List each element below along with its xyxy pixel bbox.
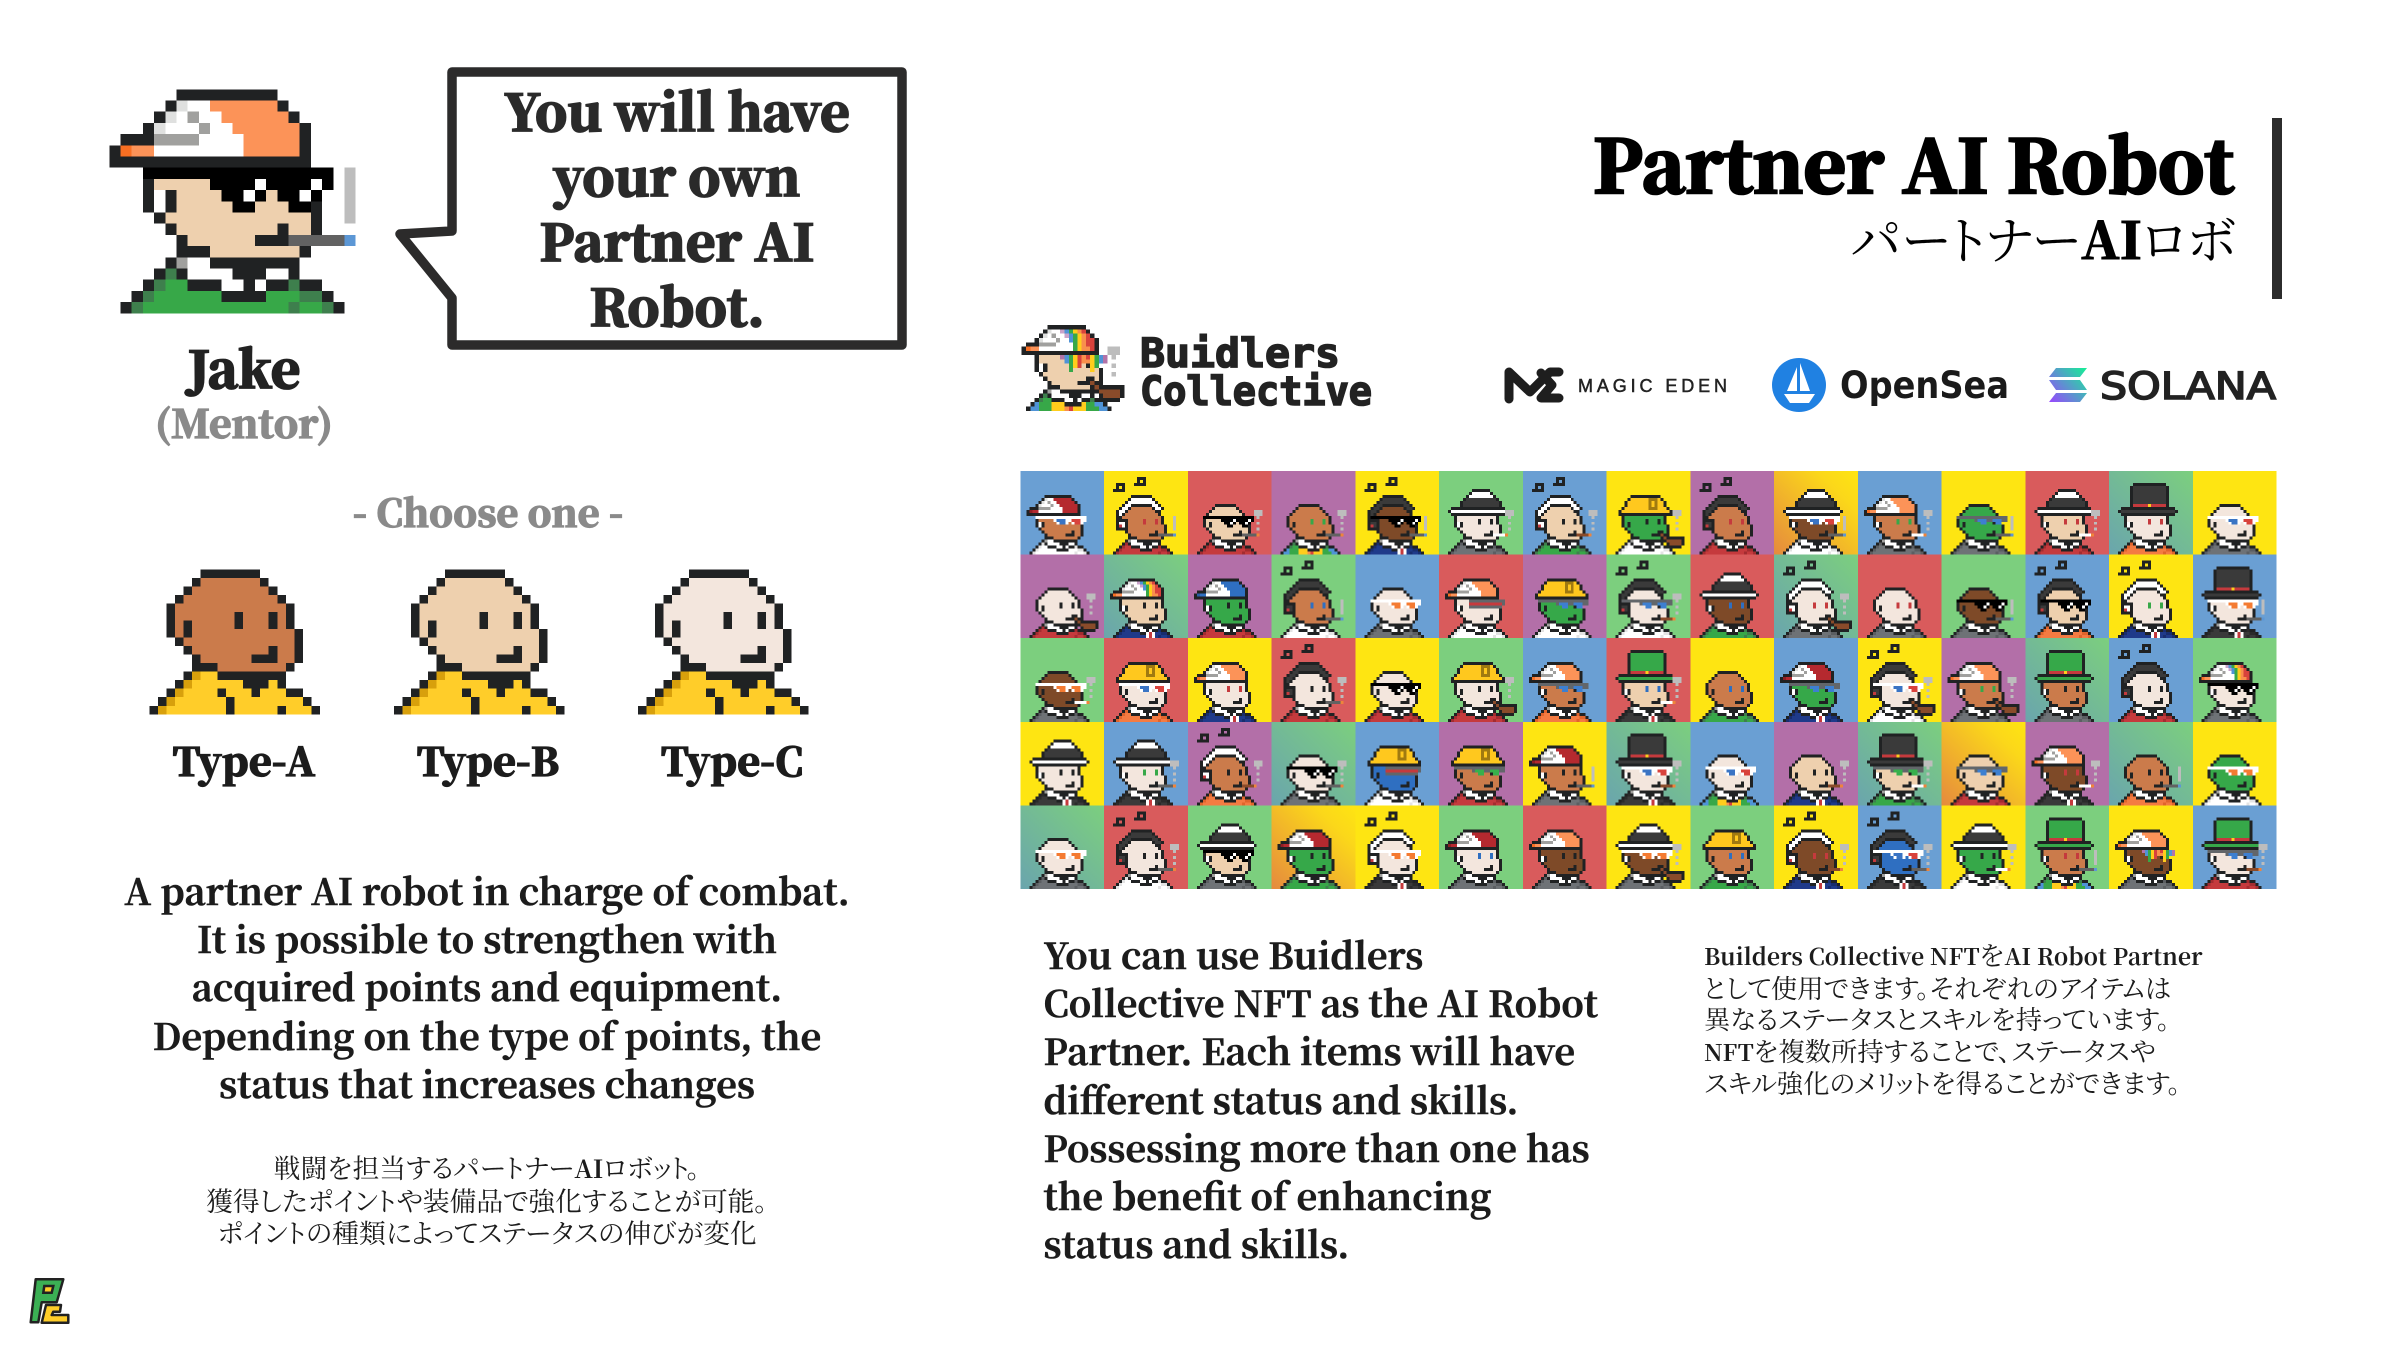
avatar row 5 column 12 bbox=[1942, 805, 2025, 889]
avatar row 3 column 12 bbox=[1942, 638, 2025, 722]
text block: partner description (English): acquired points and equipment. bbox=[192, 960, 782, 1012]
avatar row 2 column 6 bbox=[1439, 555, 1523, 638]
avatar row 2 column 8 bbox=[1607, 555, 1690, 638]
avatar row 5 column 2 bbox=[1104, 805, 1188, 889]
avatar row 2 column 15 bbox=[2193, 555, 2277, 638]
avatar row 1 column 1 bbox=[1020, 471, 1104, 555]
speech bubble text: Partner AI bbox=[539, 204, 815, 276]
avatar row 1 column 9 bbox=[1690, 471, 1774, 555]
avatar row 1 column 6 bbox=[1439, 471, 1523, 555]
avatar row 1 column 13 bbox=[2025, 471, 2109, 555]
avatar row 3 column 7 bbox=[1523, 638, 1607, 722]
avatar row 5 column 13 bbox=[2025, 805, 2109, 889]
avatar row 3 column 1 bbox=[1020, 638, 1104, 722]
avatar row 5 column 6 bbox=[1439, 805, 1523, 889]
avatar row 1 column 12 bbox=[1942, 471, 2025, 555]
text block: partner description (English): Depending on the type of points, the bbox=[153, 1009, 821, 1061]
avatar row 1 column 8 bbox=[1607, 471, 1690, 555]
avatar row 2 column 11 bbox=[1858, 555, 1942, 638]
avatar row 3 column 8 bbox=[1607, 638, 1690, 722]
avatar row 1 column 14 bbox=[2109, 471, 2193, 555]
label: Choose one: - Choose one - bbox=[353, 484, 623, 538]
avatar row 3 column 4 bbox=[1272, 638, 1355, 722]
avatar row 2 column 13 bbox=[2025, 555, 2109, 638]
avatar row 2 column 10 bbox=[1774, 555, 1858, 638]
heading: Jake: Jake bbox=[188, 331, 300, 403]
brand text: Solana: SOLANA bbox=[2100, 365, 2276, 408]
avatar row 4 column 9 bbox=[1690, 722, 1774, 805]
avatar row 2 column 2 bbox=[1104, 555, 1188, 638]
text block: partner description (Japanese) bbox=[206, 1146, 768, 1250]
avatar row 4 column 2 bbox=[1104, 722, 1188, 805]
avatar row 1 column 10 bbox=[1774, 471, 1858, 555]
avatar row 5 column 7 bbox=[1523, 805, 1607, 889]
avatar row 1 column 7 bbox=[1523, 471, 1607, 555]
text block: NFT usage (English): You can use Buidlers bbox=[1044, 929, 1423, 980]
brand text: OpenSea: OpenSea bbox=[1840, 364, 2009, 407]
speech bubble text: Robot. bbox=[589, 269, 765, 341]
icon: Jake mentor pixel avatar bbox=[109, 95, 356, 308]
avatar row 2 column 9 bbox=[1690, 555, 1774, 638]
icon: Solana mark bbox=[2049, 368, 2087, 402]
avatar row 5 column 15 bbox=[2193, 805, 2277, 889]
avatar row 4 column 3 bbox=[1188, 722, 1272, 805]
avatar row 1 column 2 bbox=[1104, 471, 1188, 555]
label: Type-B: Type-B bbox=[417, 732, 559, 788]
avatar row 4 column 1 bbox=[1020, 722, 1104, 805]
text block: partner description (English): It is possible to strengthen with bbox=[197, 912, 777, 964]
avatar row 5 column 4 bbox=[1272, 805, 1355, 889]
avatar row 4 column 8 bbox=[1607, 722, 1690, 805]
avatar row 4 column 7 bbox=[1523, 722, 1607, 805]
avatar row 4 column 14 bbox=[2109, 722, 2193, 805]
text block: partner description (Japanese): 戦闘を担当するパートナーAIロボット。 bbox=[274, 1146, 700, 1186]
avatar row 4 column 10 bbox=[1774, 722, 1858, 805]
avatar row 1 column 5 bbox=[1355, 471, 1439, 555]
brand text: Buidlers Collective logotype: Buidlers bbox=[1140, 331, 1340, 377]
text block: NFT usage (English): status and skills. bbox=[1044, 1218, 1349, 1269]
label: Type-C: Type-C bbox=[661, 732, 803, 788]
avatar row 5 column 5 bbox=[1355, 805, 1439, 889]
avatar row 1 column 4 bbox=[1272, 471, 1355, 555]
subtitle (Japanese): パートナーAIロボ bbox=[1851, 200, 2237, 274]
text block: NFT usage (Japanese) bbox=[1704, 935, 2202, 1101]
text block: partner description (English): A partner AI robot in charge of combat. bbox=[124, 864, 850, 916]
icon: Buidlers Collective avatar logo bbox=[1022, 327, 1124, 409]
avatar row 4 column 6 bbox=[1439, 722, 1523, 805]
avatar row 2 column 4 bbox=[1272, 555, 1355, 638]
text block: NFT usage (English): Collective NFT as the AI Robot bbox=[1044, 977, 1598, 1028]
icon: Type-A robot avatar bbox=[149, 574, 320, 710]
text block: NFT usage (English) bbox=[1044, 929, 1598, 1269]
avatar row 1 column 11 bbox=[1858, 471, 1942, 555]
avatar row 2 column 3 bbox=[1188, 555, 1272, 638]
avatar row 4 column 4 bbox=[1272, 722, 1355, 805]
text block: partner description (Japanese): 獲得したポイントや装備品で強化することが可能。 bbox=[206, 1180, 768, 1218]
avatar row 4 column 12 bbox=[1942, 722, 2025, 805]
avatar row 4 column 15 bbox=[2193, 722, 2277, 805]
text block: partner description (English): status that increases changes bbox=[219, 1057, 755, 1109]
avatar row 2 column 1 bbox=[1020, 555, 1104, 638]
avatar row 5 column 10 bbox=[1774, 805, 1858, 889]
avatar row 3 column 10 bbox=[1774, 638, 1858, 722]
avatar row 3 column 13 bbox=[2025, 638, 2109, 722]
text block: NFT usage (English): different status and skills. bbox=[1044, 1074, 1518, 1125]
icon: Type-C robot avatar bbox=[638, 574, 809, 710]
avatar row 4 column 13 bbox=[2025, 722, 2109, 805]
text block: NFT usage (Japanese): スキル強化のメリットを得ることができます。 bbox=[1704, 1063, 2181, 1101]
text block: NFT usage (Japanese): NFTを複数所持することで、ステータスや bbox=[1704, 1030, 2156, 1068]
avatar row 3 column 3 bbox=[1188, 638, 1272, 722]
label: Type-A: Type-A bbox=[173, 732, 315, 788]
speech bubble text bbox=[504, 74, 850, 341]
avatar row 2 column 5 bbox=[1355, 555, 1439, 638]
avatar row 3 column 14 bbox=[2109, 638, 2193, 722]
brand text: Magic Eden: MAGIC EDEN bbox=[1578, 376, 1727, 396]
icon: Magic Eden mark bbox=[1509, 372, 1559, 399]
avatar row 3 column 15 bbox=[2193, 638, 2277, 722]
avatar row 5 column 14 bbox=[2109, 805, 2193, 889]
text block: NFT usage (Japanese): として使用できます。それぞれのアイテムは bbox=[1704, 968, 2171, 1006]
text block: NFT usage (English): Possessing more than one has bbox=[1044, 1122, 1590, 1173]
avatar row 1 column 3 bbox=[1188, 471, 1272, 555]
speech bubble text: your own bbox=[554, 139, 800, 211]
icon: OpenSea mark bbox=[1772, 358, 1826, 412]
text block: NFT usage (Japanese): 異なるステータスとスキルを持っています。 bbox=[1704, 999, 2170, 1037]
text block: NFT usage (English): the benefit of enhancing bbox=[1044, 1170, 1491, 1221]
avatar row 2 column 14 bbox=[2109, 555, 2193, 638]
label: Mentor: (Mentor) bbox=[155, 395, 333, 450]
avatar row 2 column 12 bbox=[1942, 555, 2025, 638]
title: Partner AI Robot bbox=[1593, 109, 2234, 214]
avatar row 5 column 9 bbox=[1690, 805, 1774, 889]
avatar row 5 column 1 bbox=[1020, 805, 1104, 889]
avatar row 4 column 5 bbox=[1355, 722, 1439, 805]
decorative title bar bbox=[2272, 118, 2282, 299]
icon: PC corner logo bbox=[31, 1279, 68, 1323]
avatar row 3 column 11 bbox=[1858, 638, 1942, 722]
text block: partner description (English) bbox=[124, 864, 850, 1109]
avatar row 3 column 2 bbox=[1104, 638, 1188, 722]
icon: Type-B robot avatar bbox=[394, 574, 565, 710]
speech bubble text: You will have bbox=[504, 74, 850, 146]
brand text: Buidlers Collective logotype bbox=[1140, 331, 1372, 415]
avatar row 3 column 9 bbox=[1690, 638, 1774, 722]
brand text: Buidlers Collective logotype: Collective bbox=[1140, 369, 1372, 415]
text block: partner description (Japanese): ポイントの種類によってステータスの伸びが変化 bbox=[217, 1212, 757, 1250]
text block: NFT usage (Japanese): Builders Collective NFTをAI Robot Partner bbox=[1704, 935, 2202, 973]
avatar row 5 column 8 bbox=[1607, 805, 1690, 889]
avatar row 2 column 7 bbox=[1523, 555, 1607, 638]
avatar row 1 column 15 bbox=[2193, 471, 2277, 555]
callout: speech bubble outline bbox=[400, 72, 902, 345]
avatar row 5 column 3 bbox=[1188, 805, 1272, 889]
avatar row 3 column 5 bbox=[1355, 638, 1439, 722]
avatar row 4 column 11 bbox=[1858, 722, 1942, 805]
text block: NFT usage (English): Partner. Each items will have bbox=[1044, 1025, 1575, 1076]
avatar row 5 column 11 bbox=[1858, 805, 1942, 889]
avatar row 3 column 6 bbox=[1439, 638, 1523, 722]
NFT avatar grid bbox=[1020, 471, 2277, 889]
